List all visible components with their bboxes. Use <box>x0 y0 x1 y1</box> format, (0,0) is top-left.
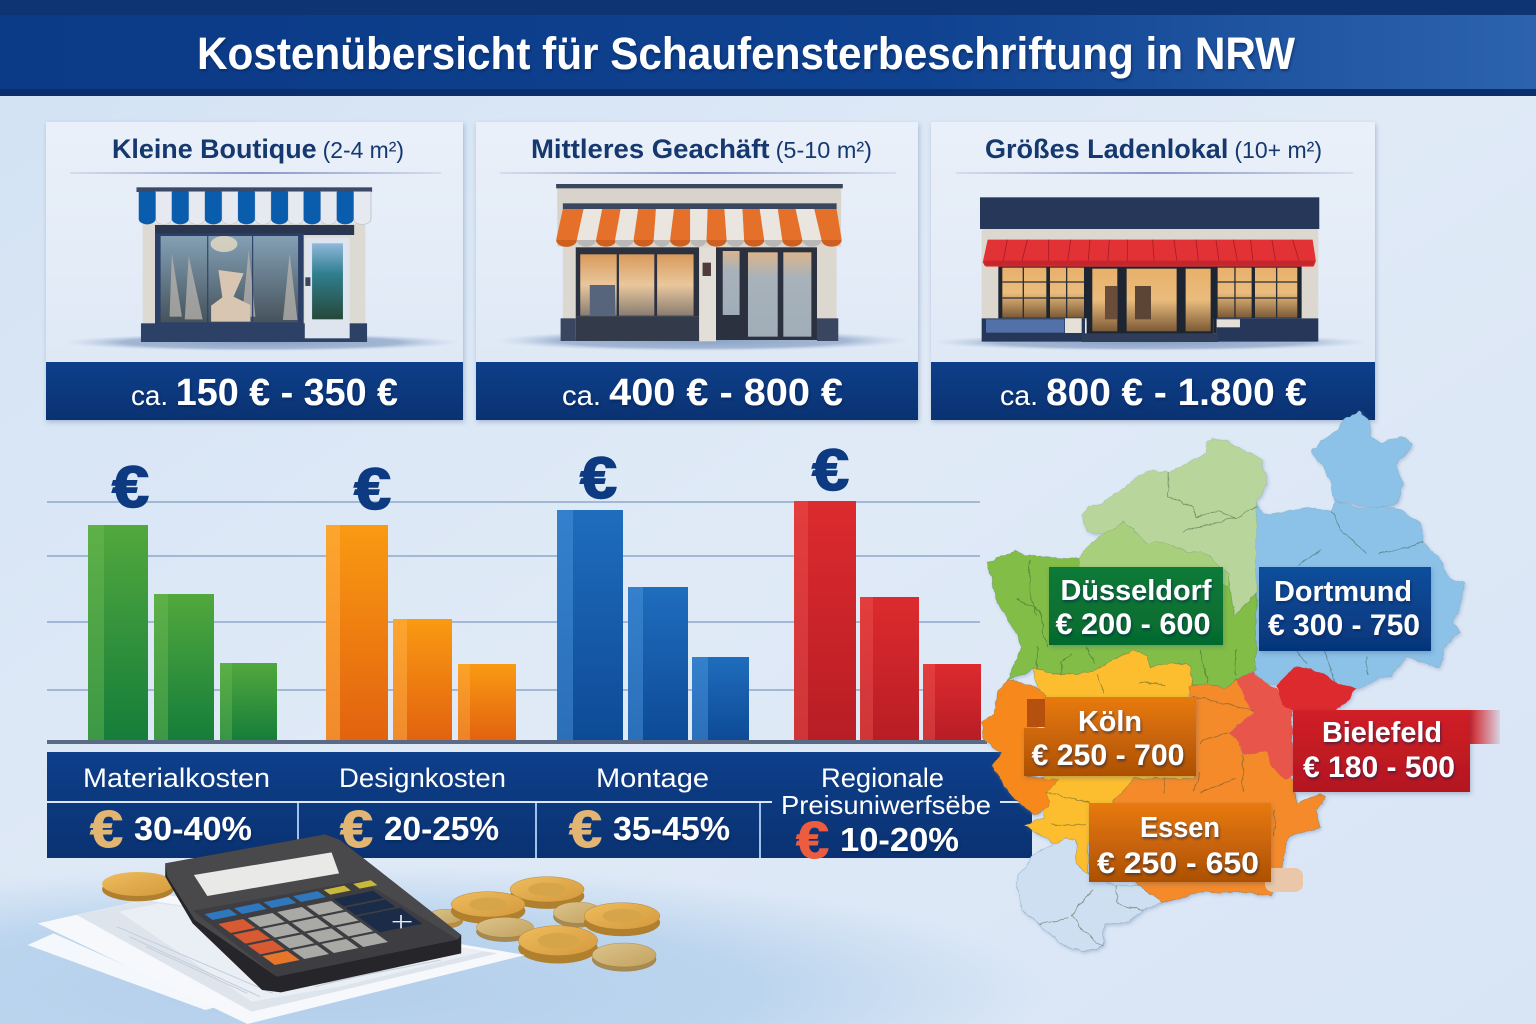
header banner <box>0 0 1536 96</box>
value: montage share: 35-45% <box>613 810 730 847</box>
panel: großes Ladenlokal <box>930 122 1375 420</box>
map label: Bielefeld: € 180 - 500 <box>1303 751 1455 784</box>
value: design share: € <box>340 801 373 859</box>
coin behind calculator <box>102 872 174 901</box>
panel: kleine Boutique <box>46 122 463 420</box>
price bar: mittleres Geschäft: ca. 400 € - 800 € <box>562 372 843 414</box>
price bar: großes Ladenlokal <box>931 362 1375 420</box>
map label: Dortmund: € 300 - 750 <box>1268 609 1420 642</box>
region: mid green <box>1079 521 1228 586</box>
map label: Essen: Essen <box>1140 812 1220 844</box>
map label: Köln: € 250 - 700 <box>1032 739 1184 772</box>
region: orange west <box>982 680 1058 816</box>
price bar: mittleres Geschäft <box>476 362 918 420</box>
region: yellow Köln <box>1024 650 1195 875</box>
value: material share: € <box>90 801 123 859</box>
title: Kostenübersicht für Schaufensterbeschriftung in NRW <box>197 28 1295 79</box>
map label: Essen: € 250 - 650 <box>1097 847 1259 880</box>
region: grey-blue south <box>1016 839 1161 952</box>
panel: mittleres Geschäft <box>476 122 918 420</box>
price bar: kleine Boutique: ca. 150 € - 350 € <box>131 372 398 414</box>
map: NRW regions <box>982 411 1465 952</box>
bars: Materialkosten <box>88 525 277 741</box>
value: design share: 20-25% <box>384 810 499 847</box>
heading: mittleres Geschäft: Mittleres Geachäft (5-10 m²) <box>531 134 872 164</box>
illustration: medium shopfront <box>494 184 910 351</box>
region: light green north <box>1081 439 1268 616</box>
value: regional share <box>796 812 959 870</box>
label: Designkosten: Designkosten <box>339 763 506 793</box>
bar chart: cost components <box>47 438 987 744</box>
map label: Bielefeld: Bielefeld <box>1322 717 1442 749</box>
heading: großes Ladenlokal: Größes Ladenlokal (10+ m²) <box>985 134 1322 164</box>
coins right <box>428 877 660 971</box>
map label: Düsseldorf: € 200 - 600 <box>1056 608 1210 641</box>
map label: Düsseldorf: Düsseldorf <box>1060 575 1212 607</box>
region: light red <box>1230 673 1294 780</box>
illustration: boutique shopfront <box>62 187 461 351</box>
label: Regionale: Regionale <box>821 763 944 793</box>
map label: Essen <box>1089 803 1303 892</box>
cost share table <box>47 752 1032 870</box>
map label: Düsseldorf <box>1049 567 1223 645</box>
region: orange east <box>1111 673 1326 903</box>
value: design share <box>340 801 499 859</box>
value: montage share <box>569 801 730 859</box>
value: montage share: € <box>569 801 602 859</box>
map label: Köln: Köln <box>1078 706 1142 738</box>
bars: Designkosten <box>326 525 516 741</box>
calculator <box>165 834 461 992</box>
bars: Montage <box>557 510 749 741</box>
icon: euro sign 2: € <box>354 457 391 522</box>
map label: Köln <box>1024 697 1196 776</box>
bars: regionale Preisunterschiede <box>794 501 981 741</box>
papers <box>28 895 525 1024</box>
value: material share: 30-40% <box>134 810 252 847</box>
value: regional share: 10-20% <box>840 821 959 858</box>
price bar: kleine Boutique <box>46 362 463 420</box>
price bar: großes Ladenlokal: ca. 800 € - 1.800 € <box>1000 372 1307 414</box>
icon: euro sign 3: € <box>580 446 617 511</box>
icon: euro sign 4: € <box>812 438 849 503</box>
heading: kleine Boutique: Kleine Boutique(2-4 m²) <box>112 134 404 164</box>
keypad <box>205 880 441 965</box>
icon: euro sign 1: € <box>112 455 149 520</box>
map label: Dortmund: Dortmund <box>1274 576 1412 608</box>
label: Montage: Montage <box>596 763 709 793</box>
region: dark red <box>1276 666 1356 711</box>
illustration: large shopfront <box>930 197 1370 351</box>
map label: Bielefeld <box>1293 710 1500 792</box>
illustration: calculator, papers and coins <box>28 834 660 1024</box>
label: Materialkosten: Materialkosten <box>83 763 270 793</box>
label: Preisunterschiede: Preisuniwerfsëbe <box>781 790 991 820</box>
region: green Düsseldorf <box>987 521 1256 689</box>
map label: Dortmund <box>1259 567 1431 651</box>
value: regional share: € <box>796 812 829 870</box>
region: Dortmund blue <box>1253 500 1465 689</box>
district borders <box>1017 473 1424 946</box>
region: Ostwestfalen top lobe <box>1312 411 1413 507</box>
value: material share <box>90 801 252 859</box>
